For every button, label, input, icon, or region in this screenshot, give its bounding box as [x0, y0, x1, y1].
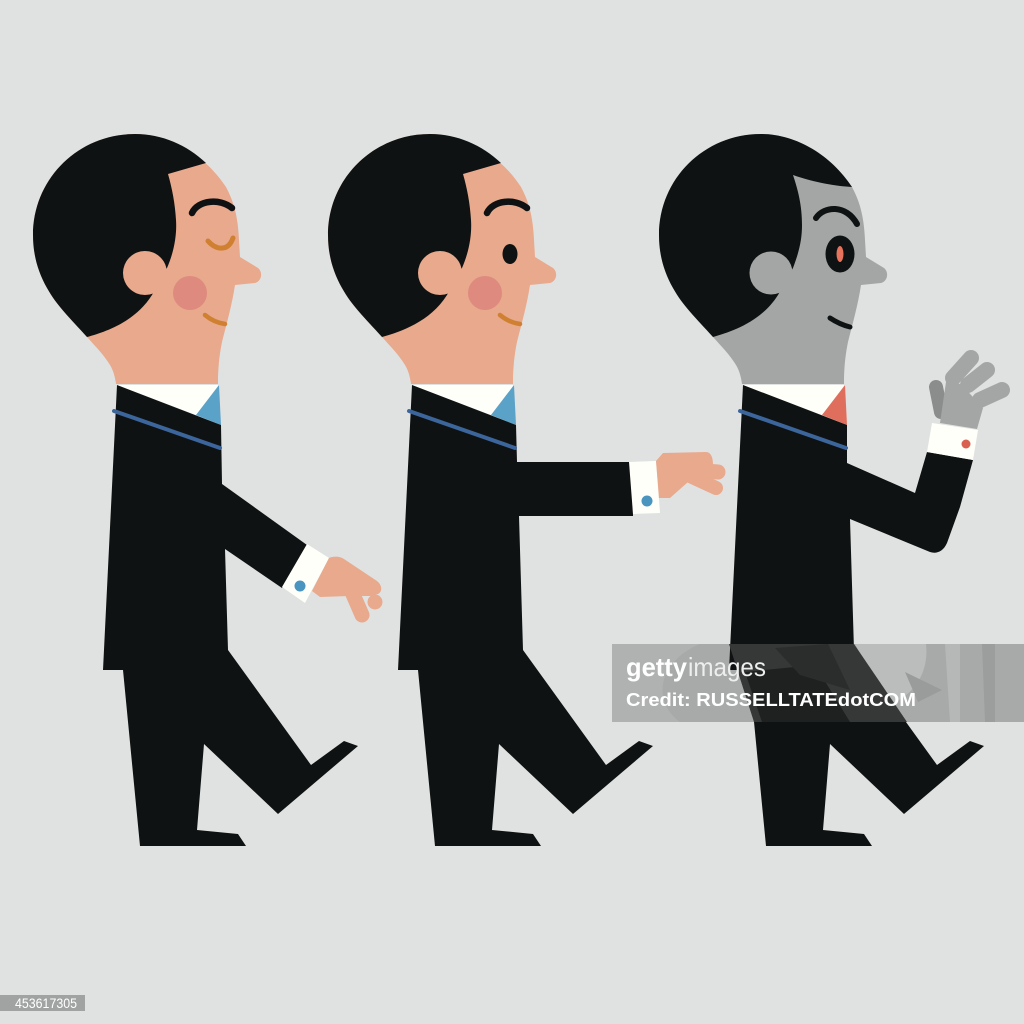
- watermark band background: [612, 644, 1024, 722]
- head: [659, 134, 887, 384]
- watermark logo: images: [688, 652, 766, 682]
- figure 3: grey-faced man with waving hand: [659, 134, 1002, 846]
- mouth: [205, 315, 225, 324]
- hand: [936, 358, 1002, 429]
- head: [328, 134, 556, 384]
- hand: [312, 557, 382, 615]
- hair: [328, 134, 501, 337]
- cheek: [468, 276, 502, 310]
- eyebrow: [192, 202, 232, 213]
- suit: [729, 385, 984, 846]
- hand: [656, 452, 718, 498]
- watermark logo: [626, 652, 766, 682]
- suit: [103, 385, 358, 846]
- collar and tie: [117, 385, 221, 425]
- hair: [33, 134, 206, 337]
- cuff button: [962, 440, 970, 448]
- cuff: [282, 544, 329, 603]
- cheek: [173, 276, 207, 310]
- cuff button: [294, 580, 306, 592]
- ear: [418, 251, 462, 295]
- suit: [398, 385, 653, 846]
- ear: [123, 251, 167, 295]
- cuff: [927, 423, 978, 460]
- hair: [659, 134, 852, 337]
- lapel line: [740, 411, 846, 448]
- eye: [502, 244, 518, 264]
- lapel line: [114, 411, 220, 448]
- mouth: [830, 318, 850, 327]
- collar and tie: [412, 385, 516, 425]
- mouth: [500, 315, 520, 324]
- ear: [750, 252, 792, 294]
- watermark overlay on legs: [729, 644, 907, 722]
- watermark logo: getty: [626, 652, 688, 682]
- eye: [826, 236, 854, 272]
- eyebrow: [816, 209, 857, 224]
- figure 1: smiling man with closed eye: [33, 134, 382, 846]
- eyebrow: [487, 202, 527, 213]
- head: [33, 134, 261, 384]
- closed eye: [208, 238, 233, 248]
- figure 2: man with open eye, arm forward: [328, 134, 718, 846]
- collar and tie: [743, 385, 847, 425]
- cuff: [629, 461, 660, 514]
- watermark credit: Credit: RUSSELLTATEdotCOM: [626, 689, 916, 710]
- cuff button: [642, 496, 652, 506]
- lapel line: [409, 411, 515, 448]
- image id tag: 453617305: [15, 996, 77, 1011]
